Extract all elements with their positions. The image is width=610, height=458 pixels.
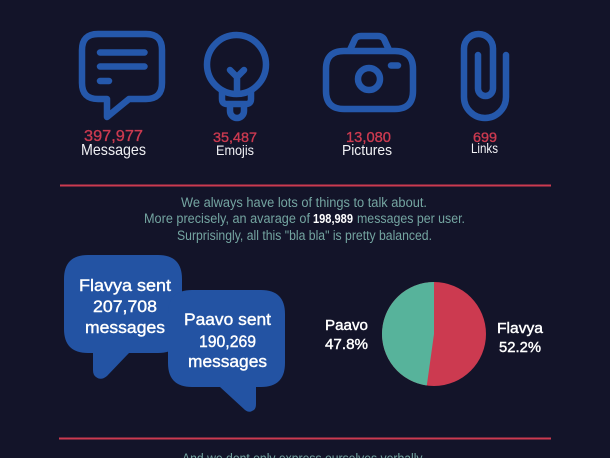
icon: light bulb — [207, 35, 266, 118]
icon: paperclip — [464, 34, 506, 118]
label: Paavo share: Paavo — [325, 318, 368, 334]
count: messages: 397,977 — [84, 128, 143, 145]
speech bubble: Paavo — [168, 290, 285, 412]
stat: emojis — [207, 35, 266, 158]
text block: summary: More precisely, an avarage of — [144, 211, 310, 226]
speech bubble: Paavo: messages — [188, 352, 267, 371]
label: Flavya share: 52.2% — [499, 340, 541, 356]
speech bubble: Flavya: messages — [85, 318, 165, 337]
speech bubble: Paavo: 190,269 — [199, 332, 256, 351]
text block: summary: messages per user. — [357, 211, 465, 226]
text block: summary — [144, 195, 465, 243]
stat: links — [464, 34, 506, 156]
pie chart — [382, 282, 486, 386]
count: pictures: 13,080 — [346, 129, 391, 146]
speech bubble: Paavo: Paavo sent — [184, 310, 271, 329]
label: links: Links — [471, 140, 498, 156]
speech bubble: Flavya: Flavya sent — [79, 276, 171, 295]
label: Flavya share: Flavya — [497, 321, 544, 337]
count: emojis: 35,487 — [213, 129, 257, 145]
speech bubble: Flavya — [64, 255, 182, 379]
text block: summary: We always have lots of things to talk about. — [181, 195, 427, 210]
count: links: 699 — [473, 129, 497, 145]
label: Paavo share: 47.8% — [325, 337, 368, 353]
label: emojis: Emojis — [216, 142, 254, 158]
label: messages: Messages — [81, 142, 146, 159]
stat: messages — [81, 34, 162, 159]
label: pictures: Pictures — [342, 142, 392, 159]
label: Flavya share — [497, 321, 544, 356]
icon: camera — [326, 36, 413, 109]
stat: pictures — [326, 36, 413, 159]
text block: summary: 198,989 — [313, 211, 353, 226]
speech bubble: Flavya: 207,708 — [93, 297, 157, 316]
icon: speech bubble — [82, 34, 162, 117]
text block: summary: Surprisingly, all this "bla bla" is pretty balanced. — [177, 228, 432, 243]
label: Paavo share — [325, 318, 368, 353]
